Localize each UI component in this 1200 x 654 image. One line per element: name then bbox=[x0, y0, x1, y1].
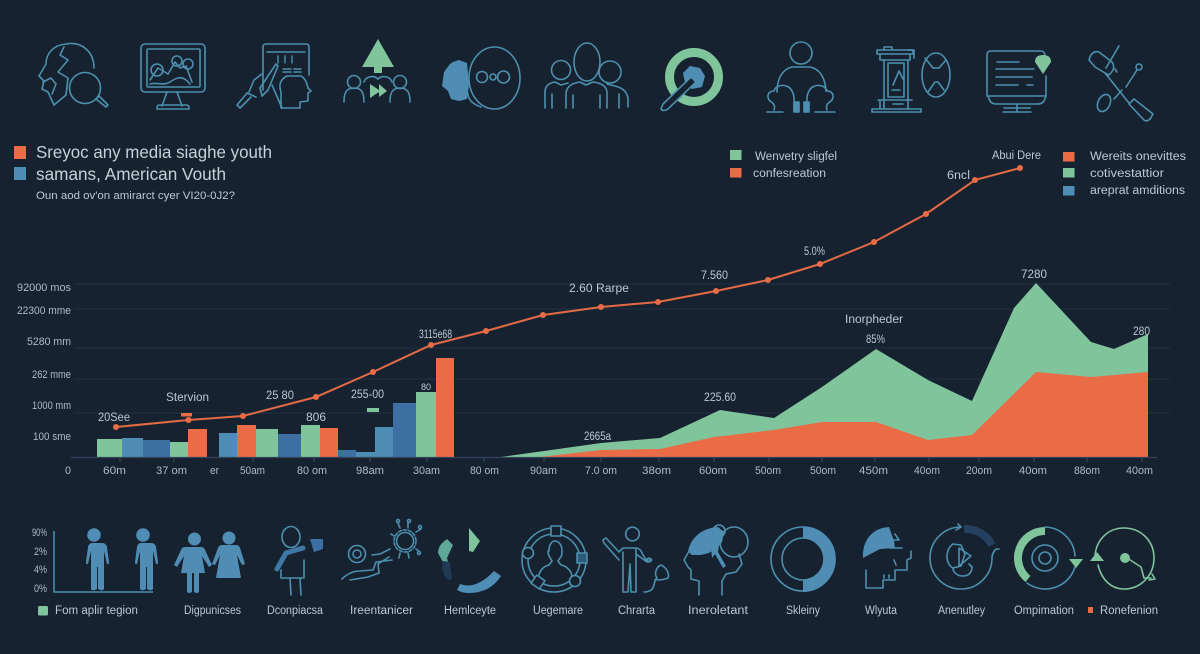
x-axis labels: 7.0 om bbox=[585, 465, 617, 477]
icon: head with speech bbox=[442, 47, 520, 109]
y-axis labels: 92000 mos bbox=[17, 282, 71, 294]
icon: monitor with pin bbox=[987, 51, 1051, 112]
legend: right: Wereits onevittes bbox=[1090, 151, 1186, 163]
y-axis labels: 100 sme bbox=[33, 431, 71, 443]
pictogram chart: two figures: 0% bbox=[34, 583, 47, 595]
bottom labels: Ronefenion bbox=[1100, 605, 1158, 617]
data labels: 806 bbox=[306, 412, 326, 424]
y-axis labels: 1000 mm bbox=[32, 400, 71, 412]
bottom labels: Digpunicses bbox=[184, 605, 241, 617]
icon: circular arrow with node bbox=[1090, 528, 1155, 589]
icon: head with magnifier and arrow bbox=[684, 525, 748, 595]
bottom labels: Skleiny bbox=[786, 605, 820, 617]
legend swatch: orange small bbox=[1088, 607, 1093, 613]
data labels: 80 bbox=[421, 382, 431, 392]
bottom labels: Ompimation bbox=[1014, 605, 1074, 617]
area chart bbox=[501, 283, 1148, 457]
icon: circuit and hand bbox=[342, 520, 422, 580]
icon row: top bbox=[39, 39, 1153, 121]
icon: seated person bbox=[767, 42, 835, 112]
data labels: 6ncl bbox=[947, 170, 970, 182]
x-axis labels: 30am bbox=[413, 465, 440, 477]
data labels: 7280 bbox=[1021, 269, 1047, 281]
x-axis labels: 37 om bbox=[156, 465, 187, 477]
bottom labels: Ineroletant bbox=[688, 605, 749, 617]
data labels: 2665a bbox=[584, 431, 612, 443]
title block bbox=[14, 142, 272, 202]
data labels: 3115e68 bbox=[419, 329, 452, 341]
legend: center bbox=[730, 150, 837, 180]
icon row: bottom bbox=[32, 520, 1155, 595]
icon: hand tool and head bbox=[237, 44, 311, 108]
data labels: 85% bbox=[866, 334, 885, 346]
bar chart bbox=[97, 358, 454, 457]
legend: center: Wenvetry sligfel bbox=[755, 151, 837, 163]
legend swatch: green bbox=[38, 606, 48, 616]
data labels: 280 bbox=[1133, 326, 1150, 338]
icon: monitor with chart bbox=[141, 44, 205, 109]
icon: segmented ring bbox=[438, 528, 501, 593]
data labels bbox=[98, 150, 1150, 443]
bottom labels: Uegemare bbox=[533, 605, 583, 617]
icon: robot profile head bbox=[863, 527, 911, 588]
data labels: 2.60 Rarpe bbox=[569, 283, 629, 295]
bottom labels bbox=[38, 605, 1158, 617]
bottom labels: Ireentanicer bbox=[350, 605, 413, 617]
x-axis labels: 60om bbox=[699, 465, 727, 477]
y-axis labels: 262 mme bbox=[32, 369, 71, 381]
icon: two figures with skirt and dress bbox=[174, 532, 245, 593]
x-axis labels: 40om bbox=[1019, 465, 1047, 477]
data labels: Abui Dere bbox=[992, 150, 1041, 162]
bottom labels: Chrarta bbox=[618, 605, 656, 617]
legend swatch: blue bbox=[14, 167, 26, 180]
x-axis labels bbox=[65, 465, 1153, 477]
data labels: 20See bbox=[98, 412, 130, 424]
x-axis labels: 0 bbox=[65, 465, 71, 477]
x-axis labels: 80 om bbox=[297, 465, 327, 477]
icon: play cycle bbox=[930, 524, 999, 589]
icon: figure with device bbox=[277, 526, 323, 595]
y-axis labels: 5280 mm bbox=[27, 336, 71, 348]
x-axis labels: 98am bbox=[356, 465, 384, 477]
bottom labels: Hemlceyte bbox=[444, 605, 496, 617]
icon: group of people bbox=[545, 43, 628, 108]
icon: kiosk and radiation symbol bbox=[872, 47, 950, 112]
x-axis labels: 60m bbox=[103, 465, 126, 477]
x-axis labels: 40om bbox=[914, 465, 940, 477]
pictogram chart: two figures: 4% bbox=[34, 564, 47, 576]
chart: bars, areas and line bbox=[17, 150, 1170, 477]
icon: arrow above group bbox=[344, 39, 410, 102]
legend: right bbox=[1063, 151, 1186, 197]
icon: progress ring with arrow bbox=[1018, 527, 1083, 589]
line chart bbox=[113, 165, 1023, 430]
legend: right: cotivestattior bbox=[1090, 168, 1164, 180]
x-axis labels: 50am bbox=[240, 465, 265, 477]
pictogram chart: two figures: 2% bbox=[34, 546, 47, 558]
x-axis labels: er bbox=[210, 465, 219, 477]
pictogram chart: two figures: 90% bbox=[32, 527, 47, 539]
icon: target and pen bbox=[661, 52, 718, 110]
icon: half donut bbox=[771, 526, 836, 592]
x-axis labels: 50om bbox=[755, 465, 781, 477]
x-axis labels: 20om bbox=[966, 465, 992, 477]
data labels: 255-00 bbox=[351, 389, 384, 401]
legend: center: confesreation bbox=[753, 168, 826, 180]
subtitle: Oun aod ov'on amirarct cyer VI20-0J2? bbox=[36, 190, 235, 202]
data labels: Stervion bbox=[166, 392, 209, 404]
bottom labels: Fom aplir tegion bbox=[55, 605, 138, 617]
icon: crossed tools bbox=[1089, 46, 1153, 121]
x-axis labels: 90am bbox=[530, 465, 557, 477]
bottom labels: Wlyuta bbox=[865, 605, 898, 617]
data labels: 225.60 bbox=[704, 392, 736, 404]
pictogram chart: two figures bbox=[32, 527, 158, 595]
icon: head with magnifier bbox=[39, 44, 108, 107]
title line 2: samans, American Vouth bbox=[36, 164, 226, 184]
data labels: 7.560 bbox=[701, 270, 728, 282]
data labels: Inorpheder bbox=[845, 314, 903, 326]
x-axis labels: 38om bbox=[642, 465, 671, 477]
y-axis labels bbox=[17, 282, 71, 443]
x-axis labels: 40om bbox=[1126, 465, 1153, 477]
x-axis labels: 50om bbox=[810, 465, 836, 477]
y-axis labels: 22300 mme bbox=[17, 305, 71, 317]
bottom labels: Dconpiacsa bbox=[267, 605, 324, 617]
data labels: 25 80 bbox=[266, 390, 294, 402]
legend: right: areprat amditions bbox=[1090, 185, 1185, 197]
x-axis labels: 450m bbox=[859, 465, 888, 477]
icon: person in orbit bbox=[522, 526, 587, 592]
x-axis labels: 88om bbox=[1074, 465, 1100, 477]
x-axis labels: 80 om bbox=[470, 465, 499, 477]
data labels: 5.0% bbox=[804, 246, 825, 258]
legend swatch: orange bbox=[14, 146, 26, 159]
icon: figure and small pet bbox=[603, 527, 669, 592]
bottom labels: Anenutley bbox=[938, 605, 985, 617]
title line 1: Sreyoc any media siaghe youth bbox=[36, 142, 272, 162]
